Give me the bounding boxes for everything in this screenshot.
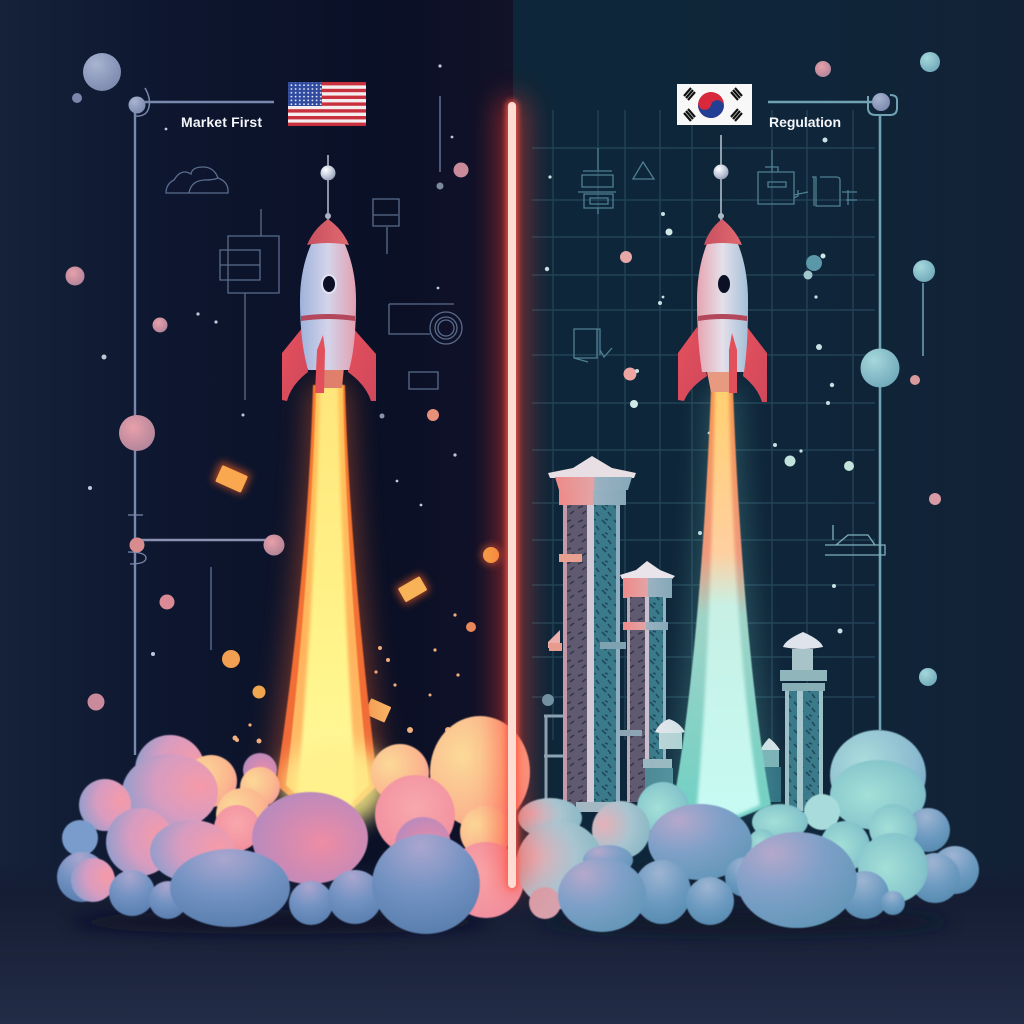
rail node large [860,348,900,388]
left floating orbs [66,53,501,710]
right rail [768,93,900,730]
fins [678,327,767,402]
right sparkle dots [545,138,842,634]
background: right panel [513,0,1024,1024]
left rocket [282,155,376,401]
flag: South Korea [677,84,752,125]
tower tiny [760,738,781,802]
nose cone [704,219,742,245]
fins [282,327,376,401]
right rocket [678,135,767,402]
tower tall [548,456,636,812]
label: Regulation: Regulation [769,114,841,130]
orange confetti pieces [212,461,430,723]
right floating orbs [620,52,941,686]
engine nozzle [318,367,344,388]
body [300,219,356,370]
floor [0,860,1024,1024]
trigrams [684,88,742,121]
center fin [729,333,737,393]
body stripe [301,314,355,321]
porthole [321,274,337,294]
body [697,219,748,372]
right cloud mass [516,730,979,932]
antenna [714,135,728,222]
left sparkle dots [88,64,460,743]
flag: USA [288,82,366,126]
tower medium [620,561,685,802]
right sketch icons [574,148,885,555]
center fin [315,335,325,393]
rail node top [872,93,890,111]
tower small right [780,632,827,811]
rail node top [128,96,146,114]
label: Market First: Market First [181,114,262,130]
left circuit rail [119,88,284,755]
left flame [270,385,387,830]
towers [542,456,827,812]
rail node pink [130,538,144,552]
regulation grid [532,110,875,740]
porthole glass [718,275,730,293]
rail node middle [119,415,155,451]
rail node end [264,534,284,556]
taeguk [695,89,727,121]
nose cone [307,219,349,245]
body stripe [698,314,747,321]
central glowing divider [500,98,524,892]
left cloud mass [57,716,530,934]
small scaffold [542,694,564,800]
porthole glass [323,276,335,292]
floor shadow left [70,910,490,934]
background: left panel [0,0,513,1024]
engine nozzle [707,372,737,392]
antenna [320,155,336,222]
left sketch icons [166,96,462,650]
floor shadow right [540,910,950,934]
right flame [666,388,778,825]
